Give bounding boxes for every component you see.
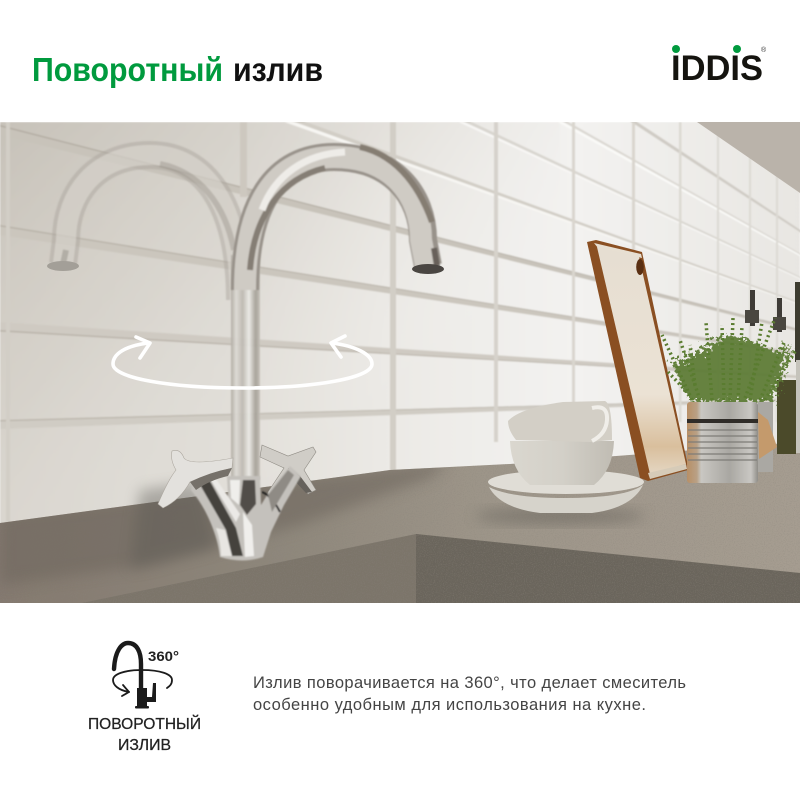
ghost spout mouth bbox=[47, 261, 79, 271]
logo: IDDIS: ® bbox=[761, 46, 767, 54]
plant bbox=[662, 318, 796, 402]
main spout bbox=[245, 147, 437, 290]
bowls and saucers bbox=[475, 401, 645, 524]
description text: особенно удобным для использования на кухне. bbox=[253, 696, 646, 714]
icon label bbox=[88, 715, 201, 754]
counter back upstand bbox=[1, 468, 442, 582]
faucet body bbox=[191, 466, 301, 560]
sink left inner wall bbox=[82, 534, 416, 603]
left handle bbox=[158, 450, 233, 508]
rotation arrow bbox=[113, 336, 372, 388]
tin can bbox=[687, 402, 758, 483]
countertop bbox=[0, 442, 800, 603]
faucet shadow bbox=[130, 482, 215, 570]
right handle bbox=[260, 444, 316, 494]
title: Поворотный bbox=[32, 51, 223, 88]
oil bottles bbox=[745, 282, 800, 454]
paper tag bbox=[758, 412, 777, 459]
photo: kitchen scene with rotating spout bbox=[0, 122, 800, 603]
cutting board bbox=[587, 240, 688, 481]
faucet stem bbox=[231, 255, 260, 480]
logo: IDDIS: IDDIS bbox=[671, 49, 763, 88]
description text: Излив поворачивается на 360°, что делает смеситель bbox=[253, 674, 686, 692]
ghost spout bbox=[63, 155, 240, 300]
rear tin can bbox=[758, 402, 773, 472]
tiled wall bbox=[0, 122, 800, 523]
sink back wall bbox=[416, 534, 800, 603]
icon label: ИЗЛИВ bbox=[118, 737, 171, 754]
title: излив bbox=[233, 51, 323, 88]
description text bbox=[253, 674, 686, 714]
main spout mouth bbox=[412, 264, 444, 274]
icon: rotating spout 360: 360° bbox=[148, 648, 179, 664]
icon: rotating spout 360 bbox=[113, 643, 179, 708]
icon label: ПОВОРОТНЫЙ bbox=[88, 715, 201, 733]
ceiling shadow bbox=[697, 122, 800, 193]
